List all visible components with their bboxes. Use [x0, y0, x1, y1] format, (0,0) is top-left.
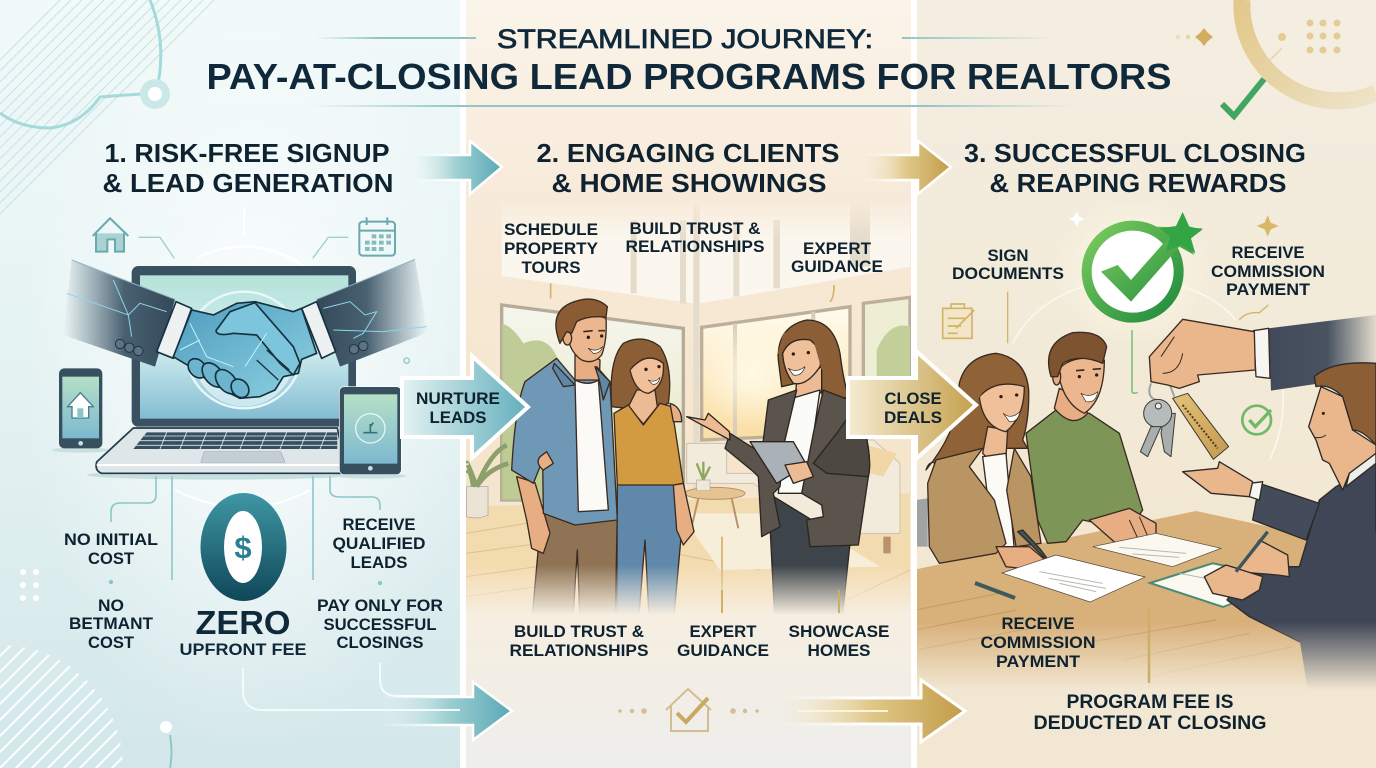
label: no betmant cost: COST	[88, 633, 135, 652]
label: receive commission payment bottom: COMMISSION	[980, 633, 1096, 652]
label: sign documents: DOCUMENTS	[952, 264, 1064, 283]
label: receive commission payment top: PAYMENT	[1226, 280, 1311, 299]
heading: step 1: & LEAD GENERATION	[102, 168, 394, 198]
label: zero upfront fee	[180, 604, 306, 659]
heading: step 1	[102, 138, 394, 198]
label: receive commission payment bottom: RECEIVE	[1002, 614, 1074, 633]
arrow: top teal	[410, 141, 502, 194]
keys	[1140, 383, 1229, 459]
label: schedule property tours: SCHEDULE	[504, 220, 598, 239]
label: receive commission payment top: COMMISSION	[1211, 262, 1325, 281]
label: pay only for successful closings	[317, 596, 443, 652]
label: program fee deducted: DEDUCTED AT CLOSING	[1034, 713, 1266, 734]
icon: tablet	[337, 387, 407, 479]
label: no betmant cost: NO	[98, 596, 124, 615]
icon: zero fee coin: $	[234, 530, 252, 565]
arrow: close deals: DEALS	[884, 408, 942, 427]
left sleeve	[63, 260, 175, 367]
label: receive qualified leads: LEADS	[350, 553, 408, 572]
label: showcase homes	[788, 622, 890, 660]
success check badge	[1087, 212, 1203, 318]
label: receive commission payment bottom: PAYMENT	[996, 652, 1081, 671]
man in blue shirt	[512, 299, 617, 623]
connector: fee line	[1148, 607, 1150, 683]
label: build trust top	[626, 219, 764, 256]
icon: house check	[618, 689, 759, 731]
label: receive commission payment bottom	[980, 614, 1096, 671]
bottom fade	[917, 622, 1376, 690]
arrow: close deals	[848, 351, 976, 459]
label: receive qualified leads: QUALIFIED	[332, 534, 426, 553]
room and windows	[466, 200, 910, 613]
title	[206, 24, 1172, 107]
arrow: bottom teal	[260, 682, 512, 740]
label: program fee deducted	[1034, 692, 1266, 734]
label: pay only for successful closings: CLOSINGS	[336, 633, 424, 652]
chair hint	[916, 498, 928, 547]
woman signing	[926, 353, 1053, 570]
label: schedule property tours: PROPERTY	[504, 239, 599, 258]
handing hand and sleeve	[1149, 315, 1376, 391]
man in green sweater	[1026, 332, 1156, 547]
arrow: bottom gold	[776, 680, 965, 742]
label: no betmant cost: BETMANT	[69, 614, 154, 633]
heading: step 3: 3. SUCCESSFUL CLOSING	[964, 138, 1306, 168]
label: receive commission payment top	[1211, 243, 1325, 299]
small check icon	[1242, 406, 1271, 434]
right sleeve	[317, 259, 427, 367]
label: expert guidance bottom: EXPERT	[690, 622, 757, 641]
label: build trust bottom	[510, 622, 648, 660]
heading: step 3: & REAPING REWARDS	[990, 168, 1286, 198]
label: showcase homes: SHOWCASE	[788, 622, 890, 641]
label: zero upfront fee: UPFRONT FEE	[180, 640, 306, 659]
table	[917, 511, 1308, 683]
shaking hands	[157, 302, 336, 401]
label: no betmant cost	[69, 596, 154, 652]
label: expert guidance top: EXPERT	[803, 239, 872, 258]
title: STREAMLINED JOURNEY:	[497, 24, 873, 54]
illustration: laptop and handshake	[52, 207, 427, 480]
connectors under laptop	[109, 476, 382, 585]
label: build trust bottom: RELATIONSHIPS	[510, 641, 648, 660]
label: build trust top: BUILD TRUST &	[630, 219, 760, 238]
laptop base	[87, 428, 353, 480]
connector: white routes to bottom arrow	[243, 663, 460, 710]
label: pay only for successful closings: PAY ONLY FOR	[317, 596, 443, 615]
heading: step 3	[964, 138, 1306, 198]
arrow: nurture leads	[402, 356, 528, 458]
illustration: home showing scene	[466, 214, 911, 613]
label: expert guidance bottom	[677, 622, 769, 660]
heading: step 2	[536, 138, 840, 198]
icon: clipboard	[943, 304, 974, 338]
label: no initial cost: NO INITIAL	[64, 530, 158, 549]
label: build trust bottom: BUILD TRUST &	[514, 622, 644, 641]
icon: house	[93, 218, 348, 258]
illustration: closing scene	[917, 212, 1376, 686]
heading: step 1: 1. RISK-FREE SIGNUP	[104, 138, 390, 168]
label: receive commission payment top: RECEIVE	[1232, 243, 1304, 262]
icon: top right check and sparkles	[1176, 28, 1264, 116]
label: receive qualified leads	[332, 515, 426, 572]
sparkles	[1069, 212, 1279, 320]
arrow: close deals: CLOSE	[884, 389, 942, 408]
label: schedule property tours: TOURS	[522, 258, 580, 277]
panel: step 3 background	[917, 0, 1376, 569]
label: sign documents: SIGN	[988, 246, 1028, 265]
label: no initial cost	[64, 530, 158, 568]
woman in mustard top	[611, 339, 694, 623]
label: expert guidance top: GUIDANCE	[791, 257, 883, 276]
label: showcase homes: HOMES	[808, 641, 870, 660]
arrow: nurture leads: NURTURE	[416, 389, 500, 408]
panel: step 2 background	[466, 0, 911, 604]
panel: step 1 background	[0, 0, 460, 768]
label: program fee deducted: PROGRAM FEE IS	[1066, 692, 1234, 713]
receiving man	[1183, 363, 1376, 700]
heading: step 2: 2. ENGAGING CLIENTS	[536, 138, 840, 168]
arrow: top gold	[862, 141, 951, 194]
label: build trust top: RELATIONSHIPS	[626, 237, 764, 256]
label: sign documents	[952, 246, 1064, 283]
icon: calendar	[359, 217, 395, 256]
connector lines	[551, 283, 839, 613]
label: zero upfront fee: ZERO	[196, 604, 290, 641]
laptop screen	[132, 266, 356, 427]
label: pay only for successful closings: SUCCESSFUL	[324, 615, 436, 634]
label: expert guidance bottom: GUIDANCE	[677, 641, 769, 660]
label: receive qualified leads: RECEIVE	[342, 515, 416, 534]
label: expert guidance top	[791, 239, 883, 276]
bottom fade	[466, 565, 911, 615]
icon: phone	[52, 368, 108, 453]
label: schedule property tours	[504, 220, 599, 277]
heading: step 2: & HOME SHOWINGS	[552, 168, 826, 198]
title: PAY-AT-CLOSING LEAD PROGRAMS FOR REALTORS	[206, 56, 1172, 97]
label: no initial cost: COST	[88, 549, 135, 568]
arrow: nurture leads: LEADS	[430, 408, 486, 427]
papers on table	[974, 533, 1238, 608]
agent with tablet	[687, 320, 870, 623]
icon: zero fee coin	[200, 493, 286, 601]
